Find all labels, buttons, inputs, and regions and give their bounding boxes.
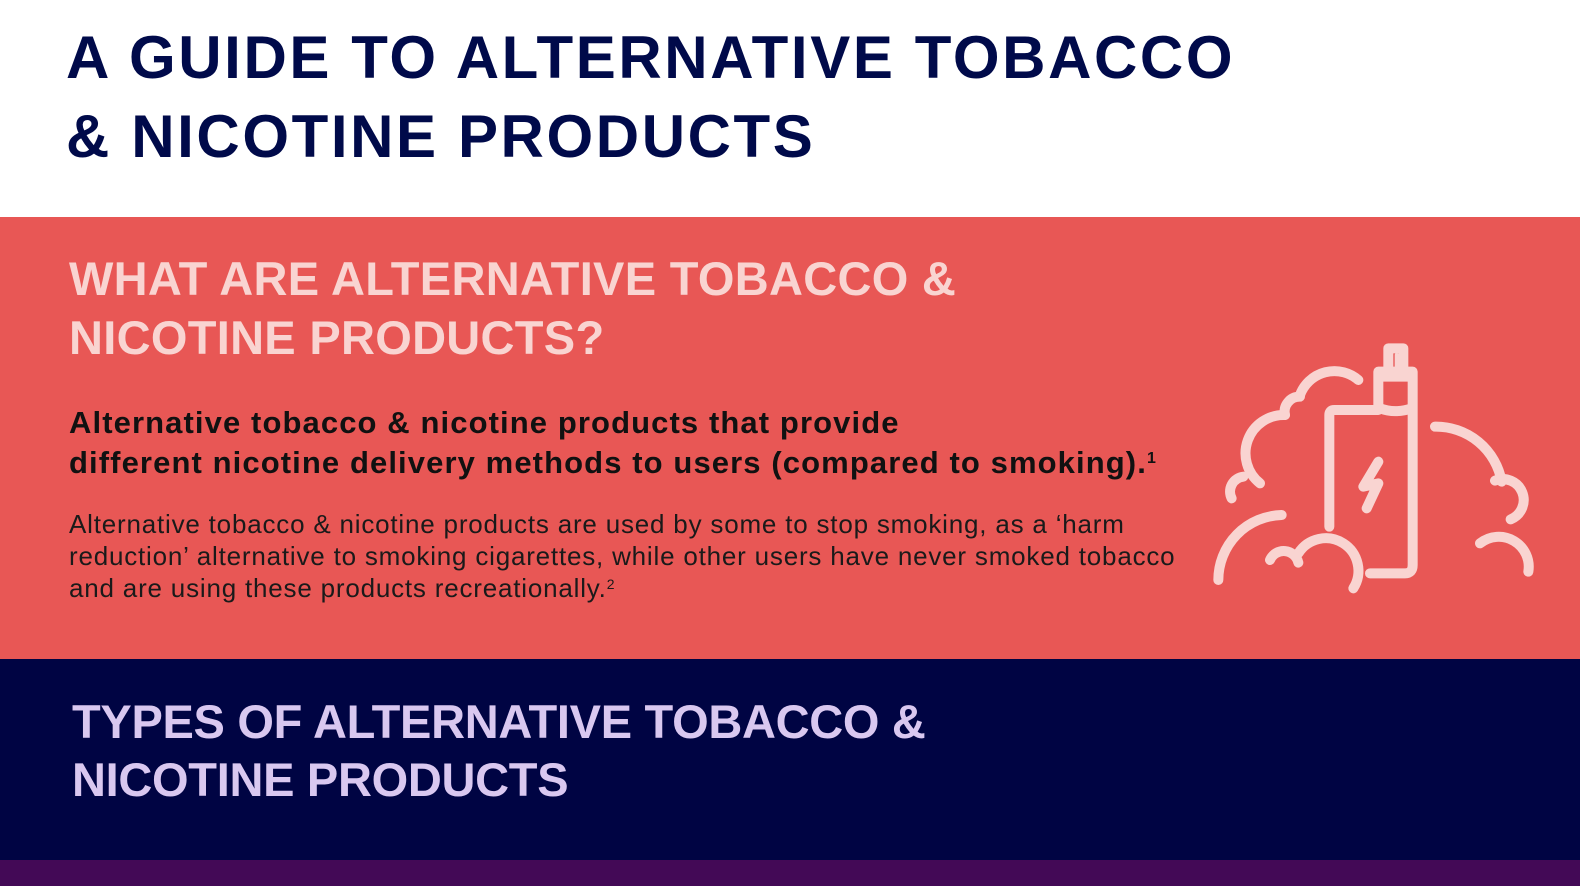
body text: and are using these products recreationally.2 (69, 573, 615, 603)
icon: vape with clouds (1213, 343, 1534, 594)
body text: Alternative tobacco & nicotine products are used by some to stop smoking, as a ‘harm (69, 509, 1125, 539)
title: A GUIDE TO ALTERNATIVE TOBACCO (66, 24, 1235, 91)
heading: what are: NICOTINE PRODUCTS? (69, 311, 604, 364)
bottom band (0, 860, 1580, 886)
bold definition text (69, 405, 1157, 480)
title (66, 24, 1235, 170)
body text (69, 509, 1175, 603)
heading: types: NICOTINE PRODUCTS (72, 753, 568, 806)
panel: what are (0, 217, 1580, 659)
bold definition text: different nicotine delivery methods to users (compared to smoking).1 (69, 445, 1157, 480)
bold definition text: Alternative tobacco & nicotine products that provide (69, 405, 900, 440)
heading: types: TYPES OF ALTERNATIVE TOBACCO & (72, 695, 926, 748)
heading: what are (69, 252, 956, 364)
body text: reduction’ alternative to smoking cigarettes, while other users have never smoked tobacco (69, 541, 1175, 571)
heading: types (72, 695, 926, 806)
title: & NICOTINE PRODUCTS (66, 103, 815, 170)
panel: types (0, 659, 1580, 860)
heading: what are: WHAT ARE ALTERNATIVE TOBACCO & (69, 252, 956, 305)
